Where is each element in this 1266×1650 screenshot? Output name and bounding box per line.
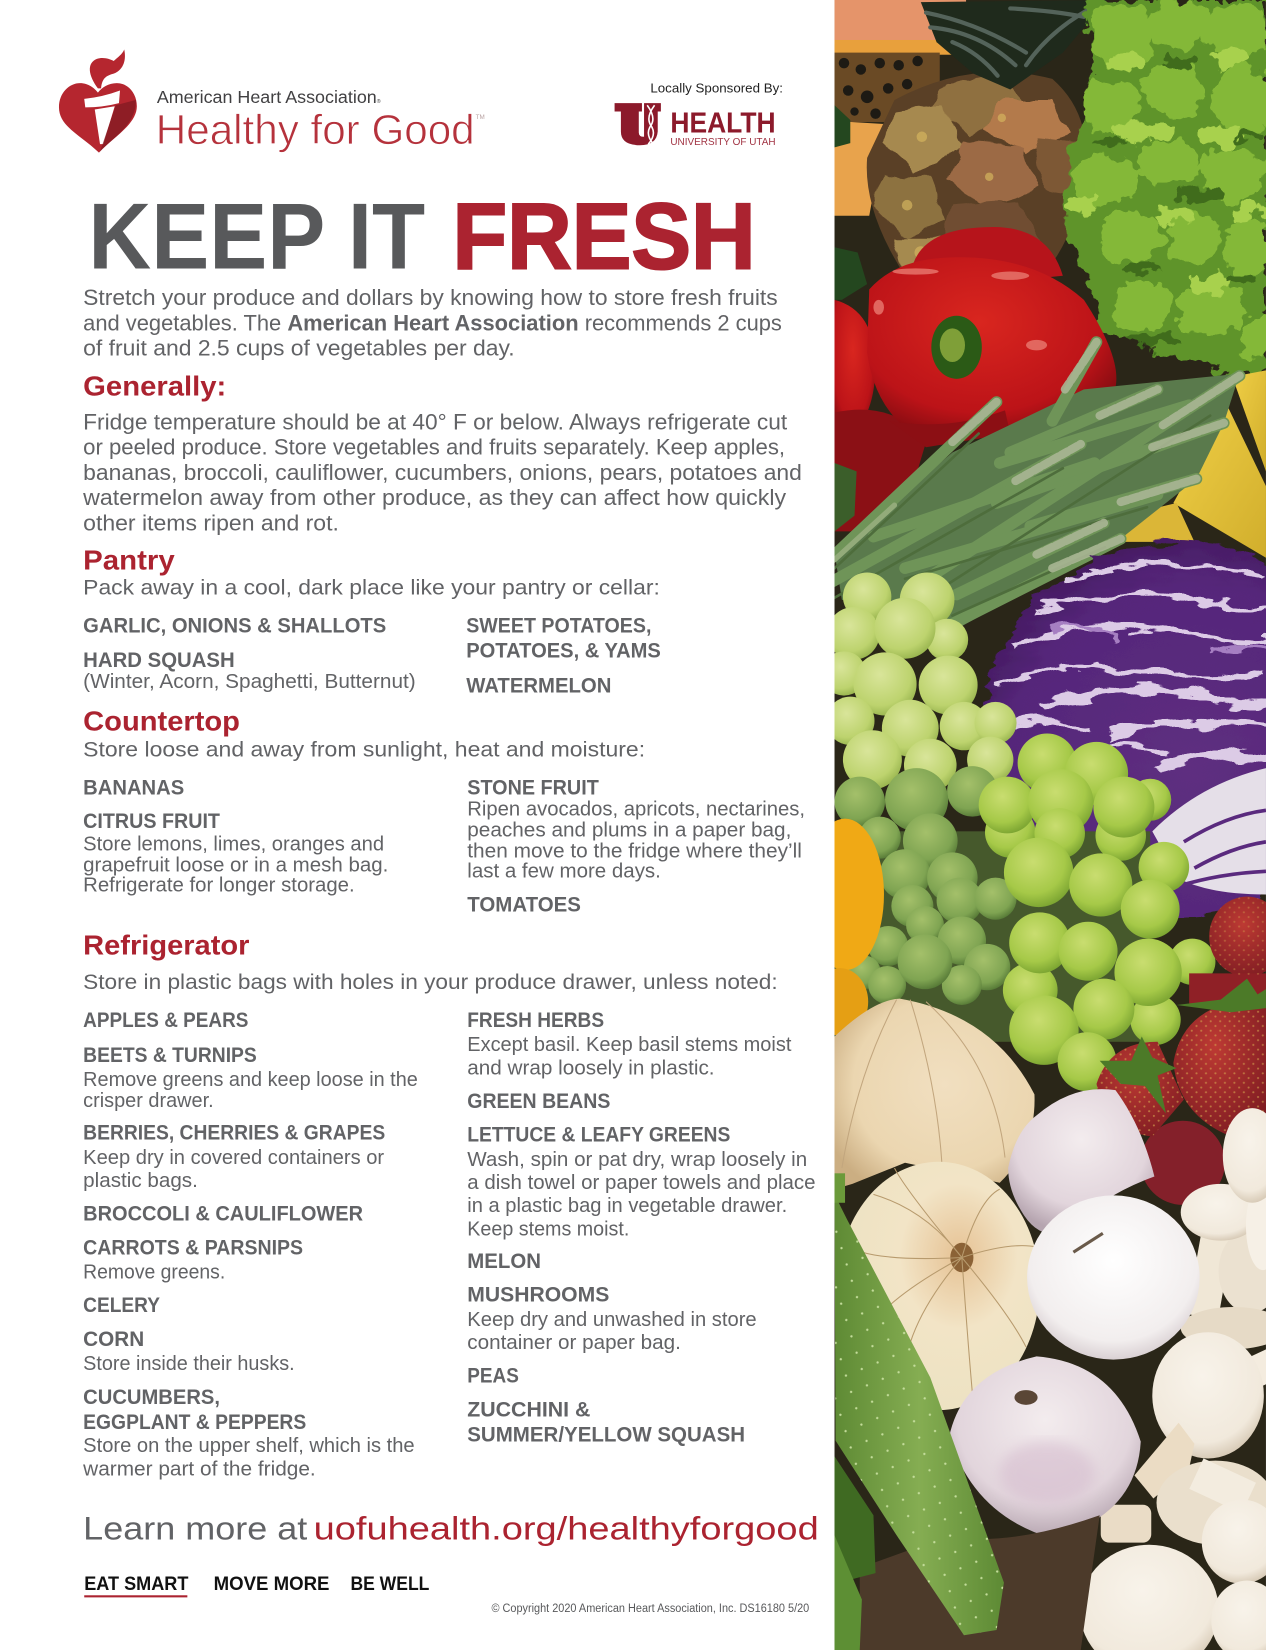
panel: countertop — [83, 705, 805, 916]
intro text: Stretch your produce and dollars by knowing how to store fresh fruits — [83, 285, 778, 310]
intro text — [83, 285, 782, 361]
photo: onions — [835, 999, 1040, 1410]
refrigerator items left column: CUCUMBERS, — [83, 1384, 220, 1409]
refrigerator items left column: Store inside their husks. — [83, 1353, 295, 1375]
panel: pantry — [83, 544, 661, 697]
intro text: and vegetables. The American Heart Association recommends 2 cups — [83, 310, 782, 335]
pantry items right column: POTATOES, & YAMS — [466, 638, 661, 663]
heading: Generally: Generally: — [83, 371, 226, 402]
refrigerator items left column: CARROTS & PARSNIPS — [83, 1234, 303, 1259]
refrigerator items left column: warmer part of the fridge. — [82, 1458, 316, 1480]
icon: U logo with DNA helix — [615, 103, 661, 145]
title: KEEP IT — [88, 183, 425, 288]
text: countertop instructions: Store loose and away from sunlight, heat and moisture: — [83, 739, 645, 762]
pantry items left column: HARD SQUASH — [83, 647, 235, 672]
refrigerator items left column: Remove greens and keep loose in the — [83, 1069, 418, 1091]
pantry items right column: SWEET POTATOES, — [466, 612, 651, 637]
countertop items right column: Ripen avocados, apricots, nectarines, — [467, 799, 805, 821]
sponsor: University of Utah Health — [615, 82, 783, 148]
photo: fresh fruits and vegetables — [806, 0, 1266, 1650]
footer tagline: eat smart, move more, be well: MOVE MORE — [214, 1574, 329, 1595]
refrigerator items left column: crisper drawer. — [83, 1090, 214, 1112]
refrigerator items right column: SUMMER/YELLOW SQUASH — [467, 1422, 745, 1447]
photo: green grapes — [822, 572, 1215, 1091]
photo: mushrooms — [1080, 1108, 1266, 1650]
countertop items right column: last a few more days. — [467, 861, 661, 883]
refrigerator items left column — [82, 1007, 418, 1480]
University of Utah wordmark: UNIVERSITY OF UTAH — [670, 136, 776, 148]
refrigerator items right column: MUSHROOMS — [467, 1282, 609, 1307]
refrigerator items right column: container or paper bag. — [467, 1332, 681, 1354]
photo: papaya — [835, 0, 966, 300]
photo: lettuce — [1063, 0, 1266, 381]
refrigerator items left column: plastic bags. — [83, 1170, 198, 1192]
heading: Refrigerator: Refrigerator — [83, 929, 250, 960]
countertop items left column: grapefruit loose or in a mesh bag. — [83, 854, 388, 876]
footer tagline: eat smart, move more, be well — [84, 1574, 429, 1597]
logo: American Heart Association Healthy for Good — [59, 49, 485, 153]
refrigerator items right column: and wrap loosely in plastic. — [467, 1057, 715, 1079]
call to action: learn more: uofuhealth.org/healthyforgood — [314, 1510, 819, 1547]
countertop items right column: STONE FRUIT — [467, 774, 599, 799]
logo text: trademark: TM — [476, 114, 485, 121]
countertop items right column: peaches and plums in a paper bag, — [467, 820, 791, 842]
logo text: Healthy for Good: Healthy for Good — [156, 106, 475, 153]
refrigerator items left column: BEETS & TURNIPS — [83, 1042, 257, 1067]
photo: table surface — [860, 1515, 1100, 1650]
intro text: of fruit and 2.5 cups of vegetables per day. — [83, 336, 515, 361]
countertop items right column — [467, 774, 805, 916]
photo: bananas — [1121, 370, 1266, 558]
text: general guidance: Fridge temperature should be at 40° F or below. Always refrigerate cut — [83, 409, 787, 434]
refrigerator items left column: CORN — [83, 1326, 144, 1351]
photo: asparagus — [826, 342, 1240, 631]
text: general guidance: other items ripen and rot. — [83, 510, 339, 535]
pantry items left column: (Winter, Acorn, Spaghetti, Butternut) — [83, 671, 416, 693]
refrigerator items right column: Keep stems moist. — [467, 1218, 629, 1240]
refrigerator items right column: ZUCCHINI & — [467, 1396, 590, 1421]
text: general guidance: watermelon away from other produce, as they can affect how quickly — [82, 485, 786, 510]
photo: yellow citrus — [834, 818, 884, 1036]
countertop items left column: Refrigerate for longer storage. — [83, 874, 355, 896]
copyright: © Copyright 2020 American Heart Association, Inc. DS16180 5/20 — [491, 1603, 809, 1615]
photo: pineapple crown — [921, 0, 1107, 89]
countertop items right column: TOMATOES — [467, 891, 581, 916]
countertop items left column: CITRUS FRUIT — [83, 808, 220, 833]
photo: red peppers — [835, 227, 1116, 531]
panel: refrigerator — [82, 929, 816, 1480]
countertop items right column: then move to the fridge where they’ll — [467, 841, 802, 863]
refrigerator items left column: CELERY — [83, 1292, 161, 1317]
refrigerator items left column: EGGPLANT & PEPPERS — [83, 1409, 306, 1434]
HEALTH wordmark: HEALTH — [670, 108, 776, 140]
refrigerator items left column: Keep dry in covered containers or — [83, 1147, 384, 1169]
text: general guidance: or peeled produce. Store vegetables and fruits separately. Keep apples, — [83, 435, 785, 460]
text: refrigerator instructions: Store in plastic bags with holes in your produce drawer, unless noted: — [83, 971, 778, 994]
call to action: learn more — [83, 1510, 819, 1547]
footer tagline: eat smart, move more, be well: BE WELL — [350, 1574, 429, 1595]
title — [88, 183, 756, 288]
photo: pineapple — [867, 72, 1086, 276]
logo text: American Heart Association: American Heart Association — [157, 87, 377, 107]
pantry items right column: WATERMELON — [466, 672, 611, 697]
photo: garlic bulbs — [949, 1089, 1200, 1538]
refrigerator items left column: BROCCOLI & CAULIFLOWER — [83, 1201, 363, 1226]
refrigerator items right column — [467, 1007, 816, 1447]
logo text: registered mark: ® — [377, 98, 381, 105]
refrigerator items right column: FRESH HERBS — [467, 1007, 604, 1032]
refrigerator items right column: MELON — [467, 1248, 541, 1273]
heading: Pantry: Pantry — [83, 544, 176, 575]
refrigerator items right column: Except basil. Keep basil stems moist — [467, 1034, 792, 1056]
countertop items left column — [83, 774, 388, 896]
countertop items left column: Store lemons, limes, oranges and — [83, 833, 384, 855]
sponsor label: Locally Sponsored By: — [650, 82, 783, 96]
call to action: learn more: Learn more at — [83, 1510, 307, 1547]
text: pantry instructions: Pack away in a cool, dark place like your pantry or cellar: — [83, 577, 660, 600]
refrigerator items right column: a dish towel or paper towels and place — [467, 1172, 816, 1194]
refrigerator items right column: GREEN BEANS — [467, 1088, 610, 1113]
refrigerator items right column: Keep dry and unwashed in store — [467, 1309, 757, 1331]
footer tagline: eat smart, move more, be well: EAT SMART — [84, 1574, 189, 1595]
icon: heart and torch — [59, 49, 137, 153]
refrigerator items left column: Store on the upper shelf, which is the — [83, 1435, 415, 1457]
pantry items left column: GARLIC, ONIONS & SHALLOTS — [83, 612, 386, 637]
title: FRESH — [453, 183, 756, 288]
pantry items right column — [466, 612, 661, 697]
refrigerator items left column: Remove greens. — [83, 1262, 225, 1284]
refrigerator items right column: PEAS — [467, 1363, 519, 1388]
photo: red cabbage — [986, 541, 1266, 915]
heading: Countertop: Countertop — [83, 705, 240, 736]
photo: zucchini — [835, 1173, 1004, 1650]
refrigerator items left column: APPLES & PEARS — [83, 1007, 248, 1032]
refrigerator items right column: LETTUCE & LEAFY GREENS — [467, 1122, 730, 1147]
countertop items left column: BANANAS — [83, 774, 184, 799]
photo: strawberries — [1097, 897, 1266, 1205]
text: general guidance: bananas, broccoli, cauliflower, cucumbers, onions, pears, potatoes and — [83, 460, 802, 485]
refrigerator items right column: Wash, spin or pat dry, wrap loosely in — [467, 1149, 807, 1171]
refrigerator items left column: BERRIES, CHERRIES & GRAPES — [83, 1120, 385, 1145]
refrigerator items right column: in a plastic bag in vegetable drawer. — [467, 1195, 787, 1217]
text: general guidance — [82, 409, 802, 535]
pantry items left column — [83, 612, 416, 693]
